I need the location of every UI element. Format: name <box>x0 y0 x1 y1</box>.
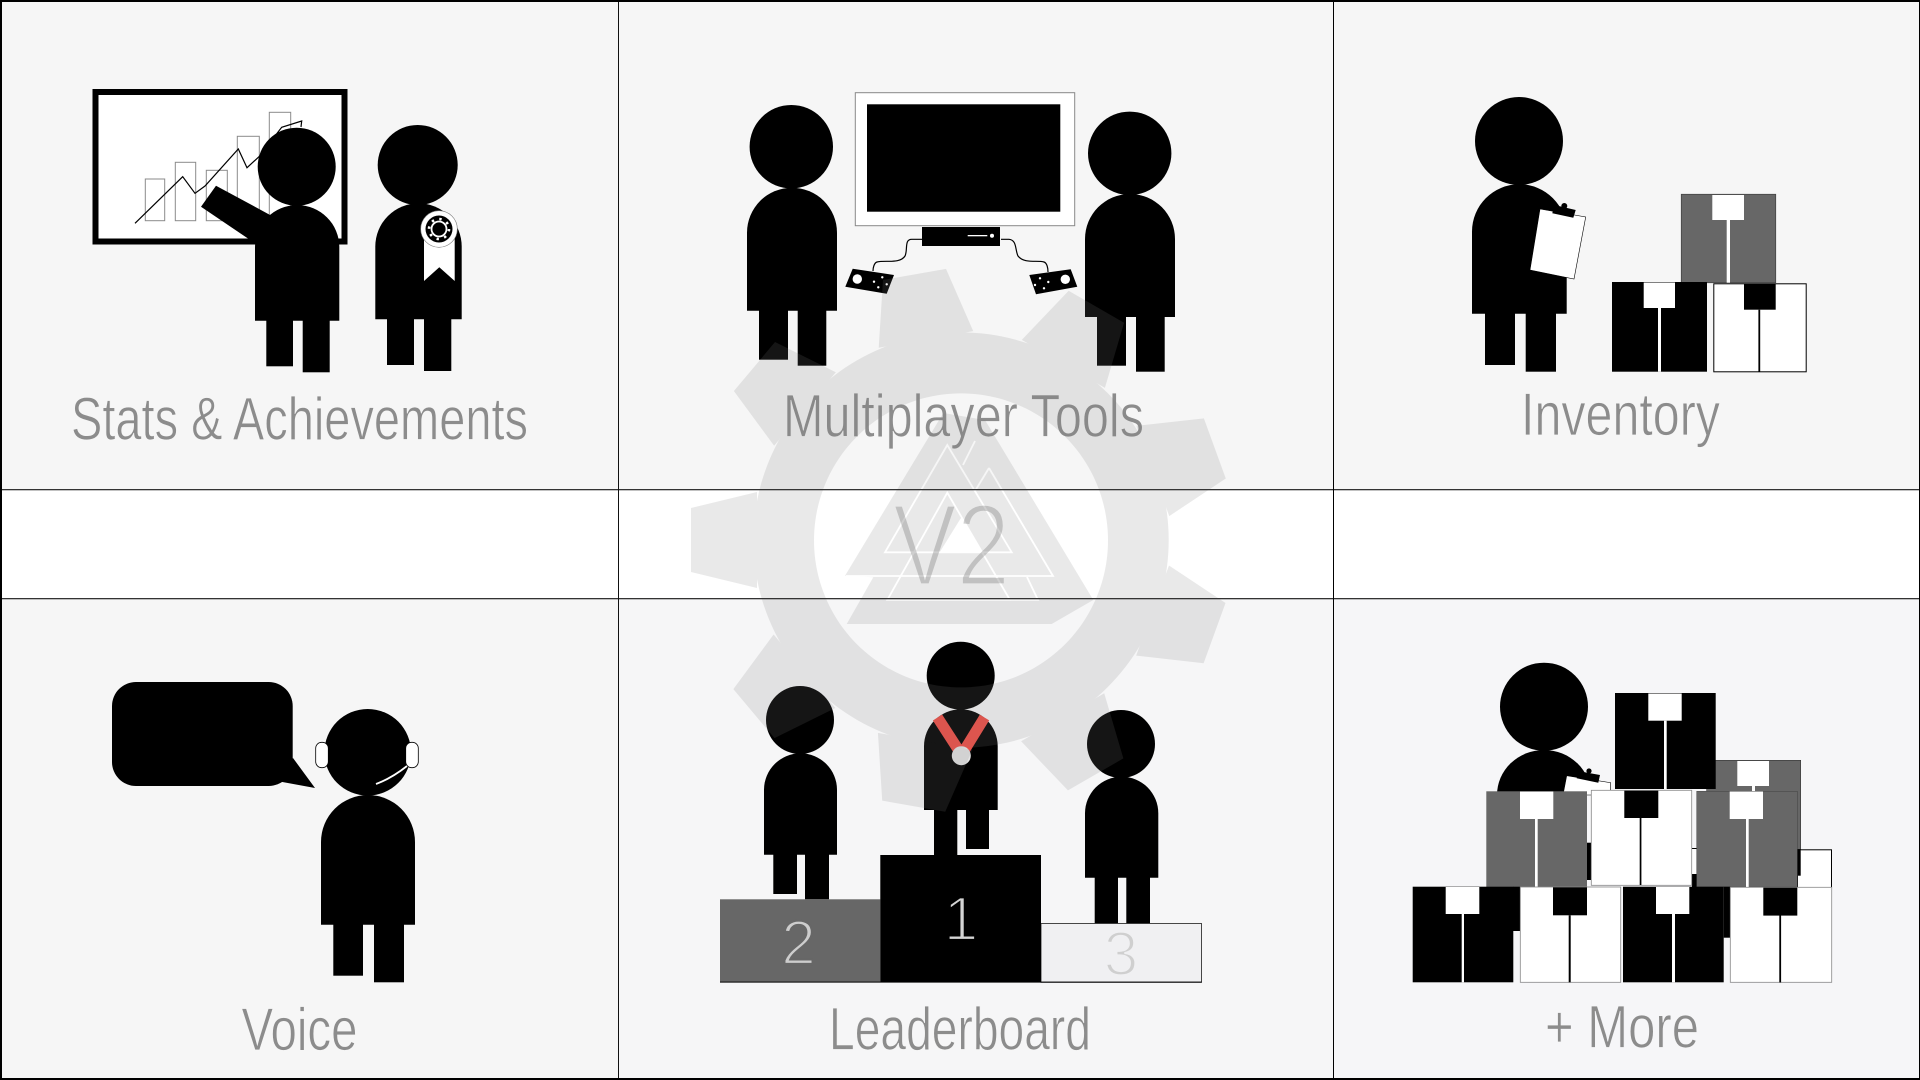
icon: podium: 2 <box>781 909 816 978</box>
icon: television <box>855 93 1075 226</box>
icon: first place figure with medal <box>924 642 998 855</box>
icon: figure with achievement ribbon <box>375 125 462 371</box>
middle band <box>0 490 1920 599</box>
icon: pile of boxes <box>1413 693 1832 982</box>
icon: podium: 1 <box>944 885 978 954</box>
icon: left controller <box>845 239 922 294</box>
icon: podium <box>720 855 1202 989</box>
panel: voice <box>0 599 618 1080</box>
heading: voice: Voice <box>242 996 358 1063</box>
heading: inventory: Inventory <box>1521 381 1720 448</box>
icon: second place figure <box>764 686 837 899</box>
icon: presentation board with chart <box>96 92 344 242</box>
heading: leaderboard: Leaderboard <box>829 996 1091 1062</box>
icon: podium: 3 <box>1104 920 1138 989</box>
icon: third place figure <box>1085 710 1158 924</box>
watermark: gear <box>691 266 1231 815</box>
panel: more <box>1334 599 1920 1080</box>
icon: presenter figure <box>201 128 339 372</box>
panel: leaderboard <box>618 599 1334 1080</box>
heading: multiplayer tools: Multiplayer Tools <box>783 382 1144 450</box>
icon: figure behind boxes <box>1497 663 1611 795</box>
panel: inventory <box>1334 0 1920 490</box>
watermark text: V2: V2 <box>893 480 1010 610</box>
icon: figure with clipboard <box>1472 97 1586 372</box>
icon: figure with headset <box>316 709 418 982</box>
heading: stats and achievements: Stats & Achievements <box>71 386 528 452</box>
icon: right player <box>1085 112 1175 372</box>
panel: multiplayer tools <box>618 0 1334 490</box>
icon: speech bubble <box>112 682 315 788</box>
icon: game console <box>922 227 1000 246</box>
panel: stats and achievements <box>0 0 618 490</box>
icon: stacked boxes <box>1612 194 1806 372</box>
icon: left player <box>747 105 837 366</box>
icon: right controller <box>1001 239 1077 294</box>
heading: more: + More <box>1545 994 1699 1060</box>
